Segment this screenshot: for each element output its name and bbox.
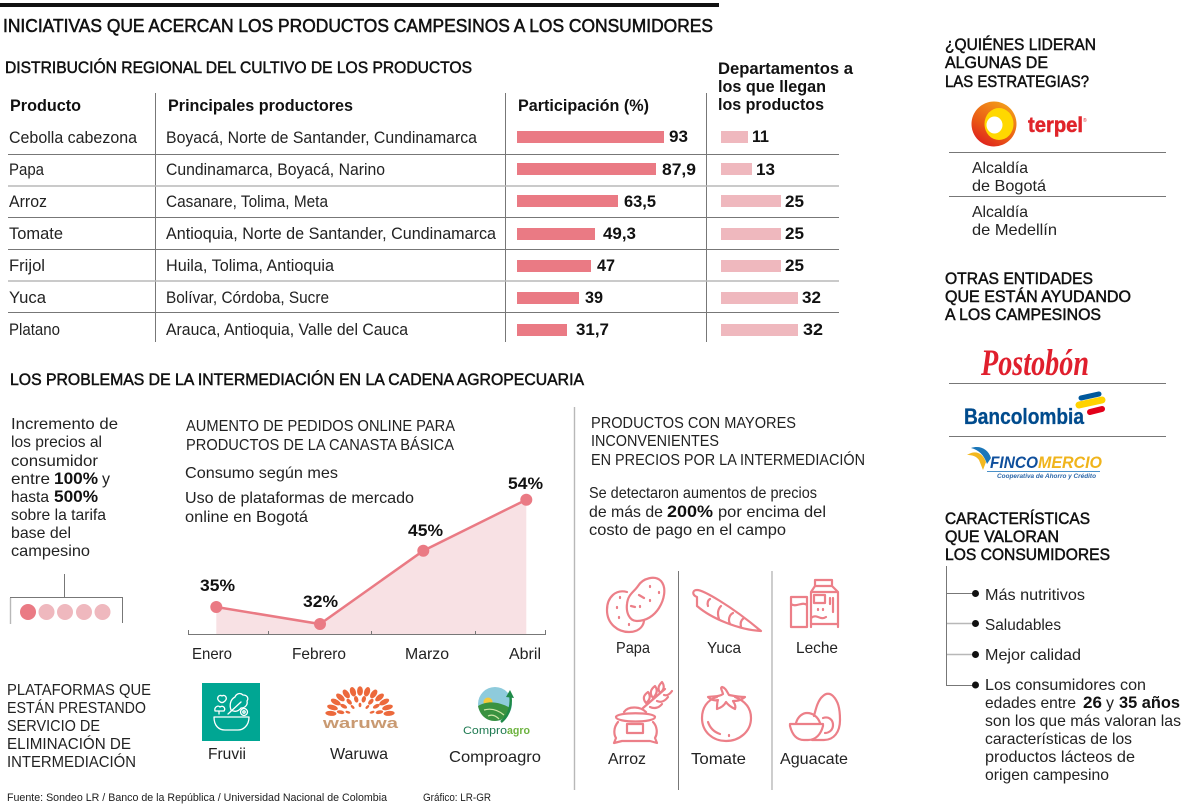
text block: price increase: Incremento de (11, 416, 118, 433)
logo: Fincomercio: FINCO (990, 453, 1038, 472)
text block: platforms: SERVICIO DE (7, 718, 100, 735)
list items: Saludables (985, 617, 1061, 634)
label: Papa: Papa (616, 640, 650, 657)
heading: characteristics: LOS CONSUMIDORES (945, 546, 1110, 564)
logo: Terpel: terpel (1028, 114, 1083, 137)
text block: 200 percent increase (589, 485, 826, 539)
heading: online orders (186, 418, 455, 454)
text block: price increase: y (102, 471, 110, 488)
list items: origen campesino (985, 767, 1109, 784)
icon: five price dots (10, 574, 122, 624)
label: Fruvii: Fruvii (208, 746, 246, 763)
logo: Comproagro: agro (507, 725, 530, 737)
logo: Terpel (972, 102, 1087, 146)
footer: credit: Gráfico: LR-GR (423, 792, 491, 804)
main producers: Boyacá, Norte de Santander, Cundinamarca (166, 129, 478, 147)
main producers: Bolívar, Córdoba, Sucre (166, 289, 329, 307)
heading: other entities: A LOS CAMPESINOS (945, 306, 1101, 324)
main producers: Huila, Tolima, Antioquia (166, 257, 335, 275)
text: Alcaldía de Bogotá (972, 160, 1046, 195)
list items: productos lácteos de (985, 749, 1135, 766)
line chart: Enero (192, 646, 232, 663)
bar chart: participation: 49,3 (603, 225, 636, 243)
heading: online orders: PRODUCTOS DE LA CANASTA BÁSICA (186, 435, 454, 454)
icon: avocado bowl (790, 694, 840, 740)
bar chart: departments reached: 13 (756, 161, 775, 179)
label: Leche: Leche (796, 640, 838, 657)
text: Alcaldía de Bogotá: de Bogotá (972, 178, 1046, 195)
text: Alcaldía de Medellín (972, 204, 1057, 239)
bar chart: participation: 93 (669, 128, 688, 146)
text: Alcaldía de Bogotá: Alcaldía (972, 160, 1028, 177)
logo: Fincomercio: Cooperativa de Ahorro y Crédito (997, 473, 1096, 480)
table column headers: Principales productores (168, 97, 353, 115)
list items: 26 (1083, 694, 1102, 712)
label: Tomate: Tomate (691, 751, 746, 768)
panel: characteristics valued (945, 509, 1181, 784)
list items: Más nutritivos (985, 587, 1085, 604)
heading: who leads: LAS ESTRATEGIAS? (945, 73, 1089, 91)
bar chart: departments reached: 25 (785, 257, 804, 275)
logo: Waruwa: waruwa (322, 715, 399, 732)
icon: tomato (702, 687, 751, 741)
main producers: Cundinamarca, Boyacá, Narino (166, 161, 385, 179)
label: Arroz: Arroz (608, 751, 646, 768)
line chart: 54% (508, 475, 543, 493)
list items: son los que más valoran las (985, 713, 1181, 730)
text block: price increase (11, 416, 118, 560)
product names: Papa (9, 161, 45, 179)
bar chart: departments reached: 25 (785, 193, 804, 211)
main producers: Arauca, Antioquia, Valle del Cauca (166, 321, 409, 339)
logo: Terpel: ® (1083, 117, 1087, 124)
bar chart: departments reached: 32 (803, 321, 823, 339)
product names: Frijol (9, 257, 45, 275)
heading: products with inconveniences: PRODUCTOS CON MAYORES (591, 415, 796, 432)
chart subtitle: online en Bogotá (185, 509, 308, 526)
chart subtitle: Consumo según mes (185, 465, 338, 482)
text: Alcaldía de Medellín: de Medellín (972, 222, 1057, 239)
panel: products with most problems (589, 415, 865, 790)
panel: other entities (945, 270, 1166, 480)
list items: edades entre (985, 695, 1076, 712)
table column headers (10, 60, 854, 115)
bar chart: departments reached: 25 (785, 225, 804, 243)
line chart (188, 475, 546, 663)
bar chart: departments reached: 32 (802, 289, 821, 307)
panel: who leads (945, 35, 1166, 239)
product names: Arroz (9, 193, 47, 211)
list items (985, 587, 1181, 784)
heading: characteristics (945, 509, 1110, 564)
text block: price increase: 500% (54, 488, 98, 506)
bar chart: departments reached: 11 (752, 128, 769, 146)
product names: Platano (9, 321, 60, 339)
icon: potato (607, 578, 664, 632)
label: Waruwa: Waruwa (330, 746, 388, 763)
bar chart: participation: 31,7 (576, 321, 609, 339)
table column headers: Producto (10, 97, 81, 115)
logo: Comproagro (463, 687, 530, 737)
bar chart: participation (517, 128, 696, 339)
logo: Fruvii (202, 683, 260, 741)
text block: platforms: INTERMEDIACIÓN (7, 752, 136, 771)
main producers: Casanare, Tolima, Meta (166, 193, 329, 211)
icon: milk (791, 580, 838, 627)
heading: products with inconveniences: INCONVENIENTES (591, 433, 719, 450)
label: Yuca: Yuca (707, 640, 741, 657)
text block: price increase: campesino (11, 543, 90, 560)
list items: características de los (985, 731, 1132, 748)
text block: price increase: 100% (54, 470, 98, 488)
logo: Fincomercio (967, 447, 1102, 480)
heading: who leads: ¿QUIÉNES LIDERAN (945, 35, 1096, 54)
heading: characteristics: CARACTERÍSTICAS (945, 509, 1090, 528)
label: Comproagro: Comproagro (449, 749, 541, 766)
table column headers: Departamentos a (718, 60, 854, 78)
heading: intermediation problems: LOS PROBLEMAS DE LA INTERMEDIACIÓN EN LA CADENA AGROPECUARIA (10, 370, 584, 389)
text block: price increase: sobre la tarifa (11, 507, 106, 524)
heading: who leads: ALGUNAS DE (945, 54, 1048, 72)
table column headers: Participación (%) (518, 97, 649, 115)
line chart: Marzo (405, 646, 449, 663)
chart subtitle: Uso de plataformas de mercado (185, 490, 414, 507)
logo: Fincomercio: MERCIO (1038, 453, 1102, 472)
text block: 200 percent increase: costo de pago en el campo (589, 522, 786, 539)
bar chart: participation: 87,9 (662, 161, 696, 179)
bullet tree (946, 566, 979, 688)
label: Aguacate: Aguacate (780, 751, 848, 768)
list items: Mejor calidad (985, 647, 1081, 664)
panel: regional distribution table (5, 58, 854, 342)
panel: online orders chart (185, 418, 546, 663)
product names (9, 129, 138, 339)
product names: Cebolla cabezona (9, 129, 138, 147)
text block: platforms: ELIMINACIÓN DE (7, 734, 131, 753)
text block: price increase: consumidor (11, 453, 99, 470)
chart subtitle (185, 465, 414, 526)
logo: Comproagro: Compro (463, 725, 507, 737)
line chart: 45% (408, 522, 443, 540)
list items: 35 años (1119, 694, 1180, 712)
text block: platforms: PLATAFORMAS QUE (7, 682, 151, 699)
heading: online orders: AUMENTO DE PEDIDOS ONLINE PARA (186, 418, 455, 435)
text block: price increase: hasta (11, 489, 49, 506)
heading: other entities: OTRAS ENTIDADES (945, 270, 1093, 288)
bar chart: participation: 47 (597, 257, 615, 275)
text block: 200 percent increase: de más de (589, 504, 663, 521)
text block: price increase: los precios al (11, 434, 102, 451)
table column headers: los que llegan (718, 78, 826, 96)
text block: price increase: base del (11, 525, 71, 542)
main producers: Antioquia, Norte de Santander, Cundinamarca (166, 225, 497, 243)
logo: Postobón: Postobón (980, 343, 1089, 384)
icon: rice sack (614, 682, 672, 743)
heading: characteristics: QUE VALORAN (945, 528, 1059, 546)
text: Alcaldía de Medellín: Alcaldía (972, 204, 1028, 221)
line chart: Abril (509, 646, 541, 663)
footer: source: Fuente: Sondeo LR / Banco de la República / Universidad Nacional de Colombia (7, 792, 388, 804)
text block: platforms: ESTÁN PRESTANDO (7, 698, 146, 717)
text block: price increase: entre (11, 471, 50, 488)
table column headers: los productos (718, 96, 824, 114)
heading: who leads (945, 35, 1096, 91)
logo: Waruwa (322, 686, 399, 732)
product names: Yuca (9, 289, 47, 307)
heading: regional distribution: DISTRIBUCIÓN REGIONAL DEL CULTIVO DE LOS PRODUCTOS (5, 58, 472, 77)
heading: other entities (945, 270, 1131, 324)
heading: products with inconveniences (591, 415, 865, 469)
logo: Bancolombia: Bancolombia (964, 404, 1085, 429)
title: INICIATIVAS QUE ACERCAN LOS PRODUCTOS CAMPESINOS A LOS CONSUMIDORES (3, 15, 713, 36)
bar chart: participation: 63,5 (624, 193, 656, 211)
list items: y (1106, 695, 1114, 712)
heading: other entities: QUE ESTÁN AYUDANDO (945, 287, 1131, 306)
line chart: 35% (200, 577, 235, 595)
icon: yuca (693, 590, 761, 631)
text block: 200 percent increase: Se detectaron aumentos de precios (589, 485, 817, 502)
text block: 200 percent increase: 200% (667, 503, 713, 521)
main producers (166, 129, 497, 339)
bar chart: departments reached (721, 128, 823, 339)
text block: platforms (7, 682, 151, 771)
product names: Tomate (9, 225, 63, 243)
heading: products with inconveniences: EN PRECIOS POR LA INTERMEDIACIÓN (591, 450, 865, 469)
line chart: 32% (303, 593, 338, 611)
bar chart: participation: 39 (585, 289, 603, 307)
list items: Los consumidores con (985, 677, 1146, 694)
line chart: Febrero (292, 646, 346, 663)
text block: 200 percent increase: por encima del (718, 504, 826, 521)
